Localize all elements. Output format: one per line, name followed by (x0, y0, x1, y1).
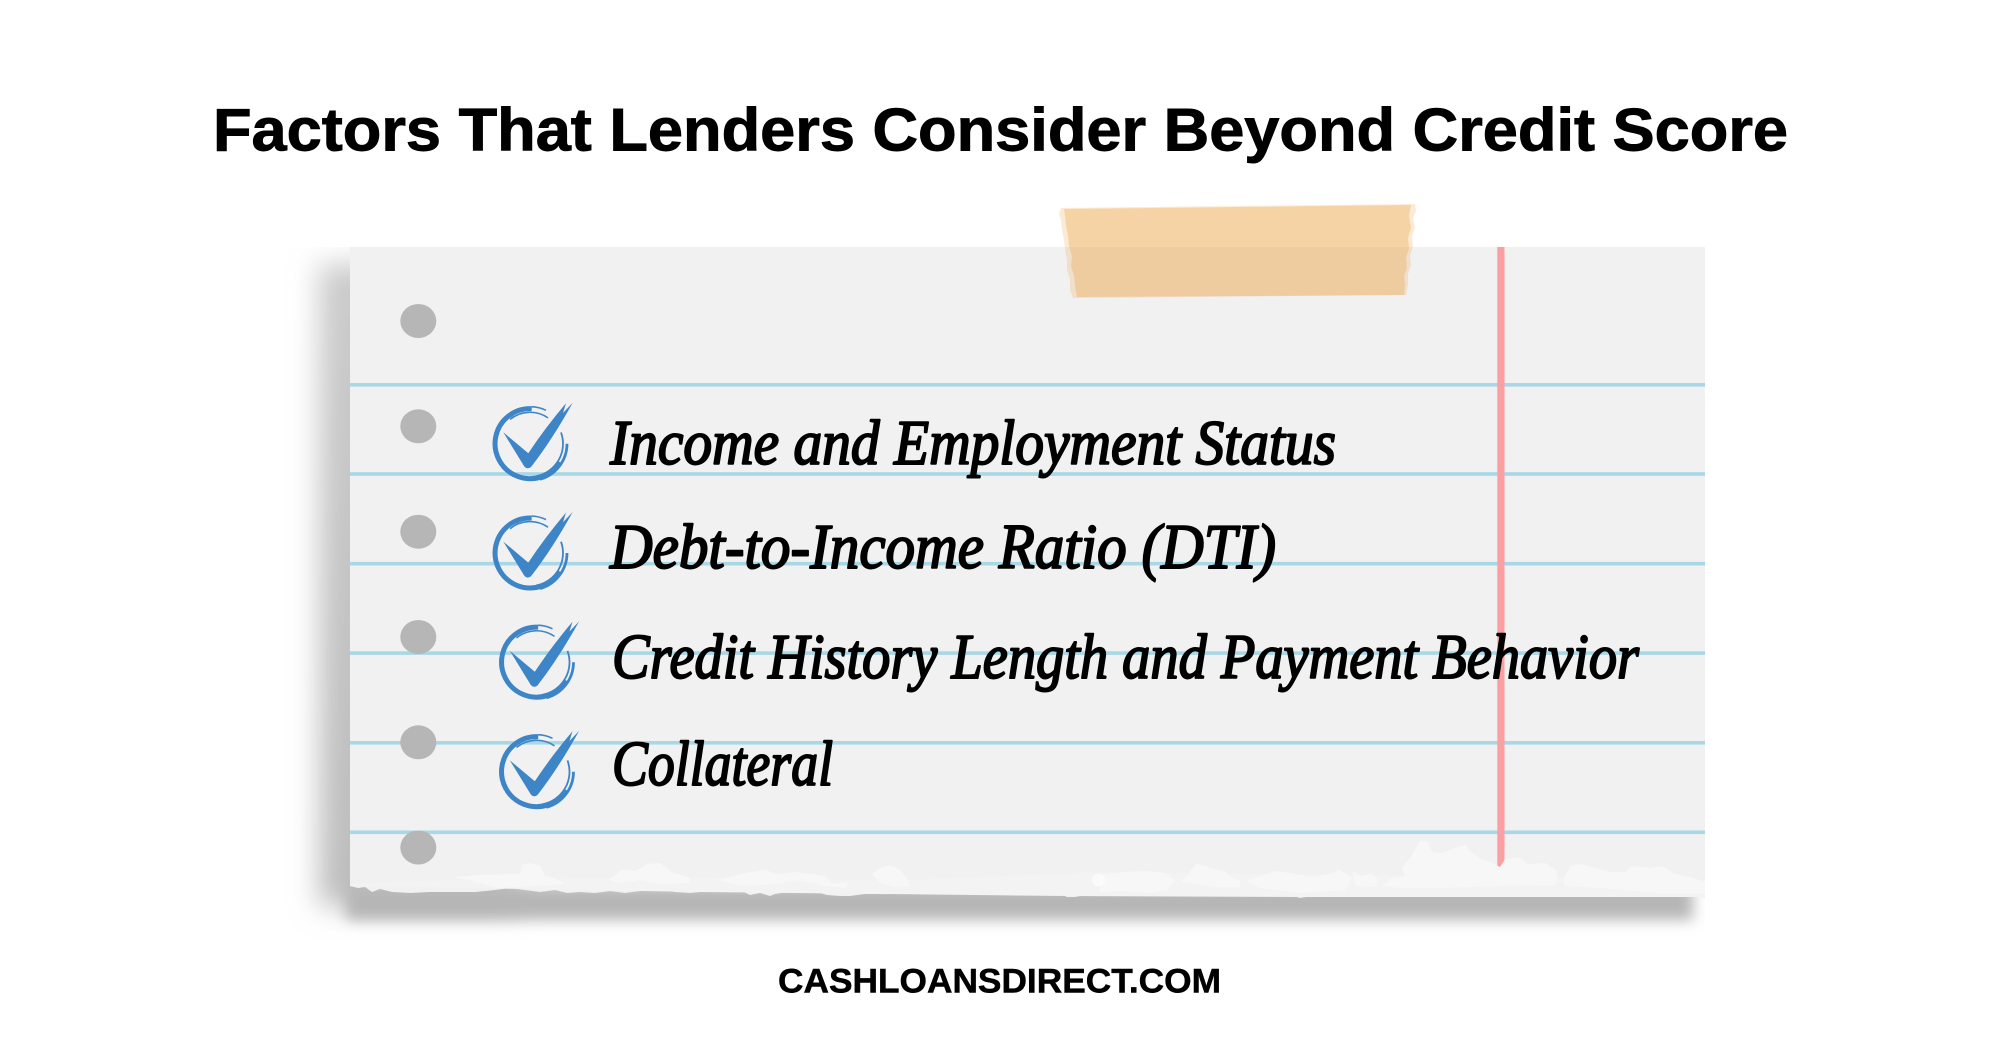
checklist item 2: Debt-to-Income Ratio (DTI) (495, 511, 1276, 589)
footer website: CASHLOANSDIRECT.COM (778, 962, 1221, 1000)
icon: check mark in circle (495, 403, 573, 479)
label text: Collateral (612, 728, 833, 799)
icon: check mark in circle (502, 621, 579, 698)
binder holes (400, 304, 436, 864)
paper shadow (319, 264, 1693, 920)
title: Factors That Lenders Consider Beyond Credit Score (213, 96, 1788, 164)
panel: torn notebook paper (319, 247, 1705, 920)
icon: check mark in circle (502, 731, 579, 807)
red margin line (1497, 247, 1504, 867)
label text: Credit History Length and Payment Behavior (612, 621, 1640, 692)
checklist item 3: Credit History Length and Payment Behavior (502, 621, 1640, 698)
blue ruled lines (350, 383, 1705, 834)
label text: Income and Employment Status (609, 407, 1336, 478)
checklist item 1: Income and Employment Status (495, 403, 1336, 479)
paper sheet with torn bottom edge (350, 247, 1705, 898)
masking tape (1059, 204, 1416, 298)
label text: Debt-to-Income Ratio (DTI) (609, 511, 1276, 582)
icon: check mark in circle (495, 512, 573, 589)
checklist item 4: Collateral (502, 728, 833, 807)
torn paper highlights (350, 841, 1705, 897)
